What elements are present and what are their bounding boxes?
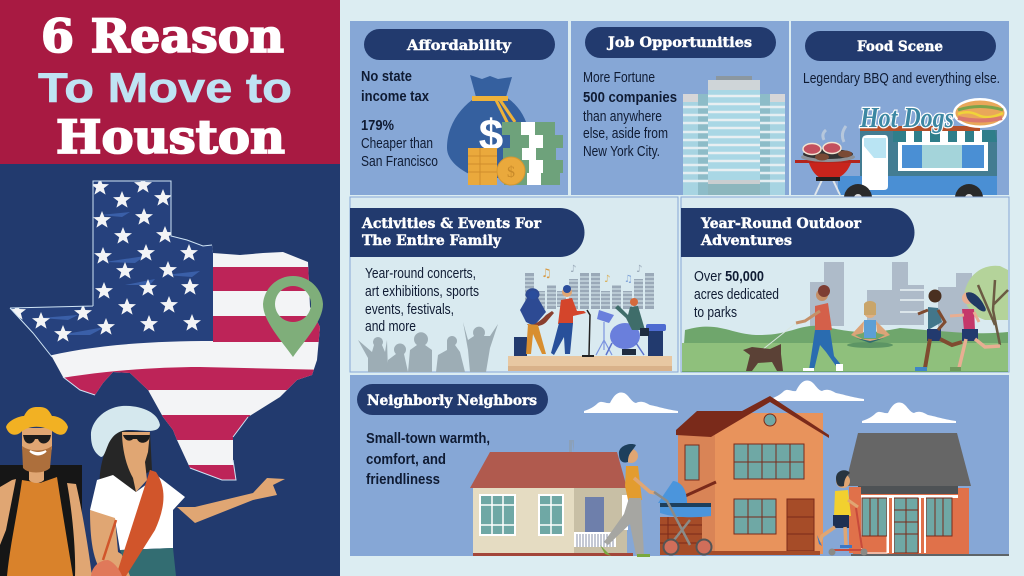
map: Texas with US flag <box>10 180 320 480</box>
illustration: orange two-storey house <box>660 396 829 555</box>
text block: fortune 500: else, aside from <box>583 126 668 142</box>
text block: activities: events, festivals, <box>365 302 454 318</box>
illustration: band on stage <box>508 285 672 371</box>
title: To Move to <box>38 64 292 111</box>
panel: neighborly neighbors <box>350 375 1009 557</box>
text block: fortune 500: New York City. <box>583 144 660 160</box>
illustration: parent with stroller <box>600 444 712 557</box>
heading: affordability <box>364 29 555 60</box>
panel: food scene <box>791 21 1009 212</box>
illustration: equalizer and music notes: ♪ <box>570 264 576 275</box>
text block: neighbors <box>366 430 490 488</box>
heading: job opportunities <box>585 27 776 58</box>
heading: neighborly neighbors: Neighborly Neighbors <box>367 393 537 409</box>
text block: fortune 500: than anywhere <box>583 109 662 125</box>
text block: parks: acres dedicated <box>694 287 779 303</box>
panel: activities and events <box>350 197 678 372</box>
illustration: hot dog truck <box>838 98 1007 212</box>
illustration: hot dog truck: Hot Dogs <box>859 102 954 134</box>
illustration: man with backpack <box>0 407 92 576</box>
illustration: equalizer and music notes: ♪ <box>604 274 610 285</box>
illustration: equalizer and music notes: ♫ <box>624 274 633 285</box>
illustration: crowd silhouettes <box>358 322 498 372</box>
panel: affordability <box>350 21 568 195</box>
text block: fortune 500: 500 companies <box>583 89 677 106</box>
text block: activities: and more <box>365 319 416 335</box>
illustration: equalizer and music notes: ♫ <box>541 266 552 280</box>
text block: activities: art exhibitions, sports <box>365 284 479 300</box>
icon: money bag with cash and coins <box>447 75 563 185</box>
illustration: equalizer and music notes: ♪ <box>636 264 642 275</box>
heading: activities and events: The Entire Family <box>362 233 502 249</box>
heading: food scene <box>805 31 996 61</box>
illustration: two runners <box>915 290 1000 371</box>
panel: outdoor adventures <box>681 197 1009 372</box>
text block: tax and cost: San Francisco <box>361 154 438 170</box>
heading: activities and events: Activities & Events For <box>361 216 542 232</box>
heading: outdoor adventures: Year-Round Outdoor <box>700 216 862 232</box>
illustration: grey roof cottage <box>845 433 1009 556</box>
illustration: woman meditating <box>847 301 893 348</box>
heading: activities and events <box>350 208 584 257</box>
title <box>38 9 292 164</box>
icon: clouds <box>584 380 956 423</box>
text block: parks: to parks <box>694 305 737 321</box>
text block: activities: Year-round concerts, <box>365 266 476 282</box>
text block: parks <box>694 269 779 321</box>
text block: tax and cost: income tax <box>361 88 430 105</box>
text block: neighbors: comfort, and <box>366 451 446 468</box>
text block: tax and cost: No state <box>361 68 412 85</box>
text block: fortune 500 <box>583 70 677 160</box>
heading: affordability: Affordability <box>406 38 512 54</box>
illustration: park with skyline <box>682 262 1008 372</box>
heading: outdoor adventures: Adventures <box>700 233 792 249</box>
illustration: office tower <box>683 76 785 195</box>
text block: neighbors: Small-town warmth, <box>366 430 490 447</box>
heading: job opportunities: Job Opportunities <box>606 35 752 51</box>
icon: location pin <box>263 276 323 357</box>
text block: tax and cost: 179% <box>361 117 394 134</box>
text block: activities <box>365 266 479 335</box>
heading: neighborly neighbors <box>357 384 548 415</box>
illustration: child on scooter <box>817 470 868 556</box>
illustration: woman walking dog <box>743 285 843 371</box>
icon: money bag with cash and coins: $ <box>479 111 503 160</box>
heading: food scene: Food Scene <box>857 39 943 55</box>
title: Houston <box>56 110 285 164</box>
panel: left sidebar <box>0 0 340 576</box>
illustration: equalizer and music notes <box>525 264 654 309</box>
heading: outdoor adventures <box>681 208 914 257</box>
title: 6 Reason <box>41 9 284 63</box>
text block: neighbors: friendliness <box>366 471 440 488</box>
panel: job opportunities <box>571 21 789 195</box>
text block: tax and cost <box>361 68 438 170</box>
text block: tax and cost: Cheaper than <box>361 136 433 152</box>
icon: money bag with cash and coins: $ <box>507 164 515 181</box>
text block: parks: Over 50,000 <box>694 269 764 285</box>
illustration: barbecue grill <box>795 126 860 195</box>
illustration: woman pointing <box>90 406 285 576</box>
illustration: beige house <box>470 440 633 556</box>
text block: fortune 500: More Fortune <box>583 70 655 86</box>
